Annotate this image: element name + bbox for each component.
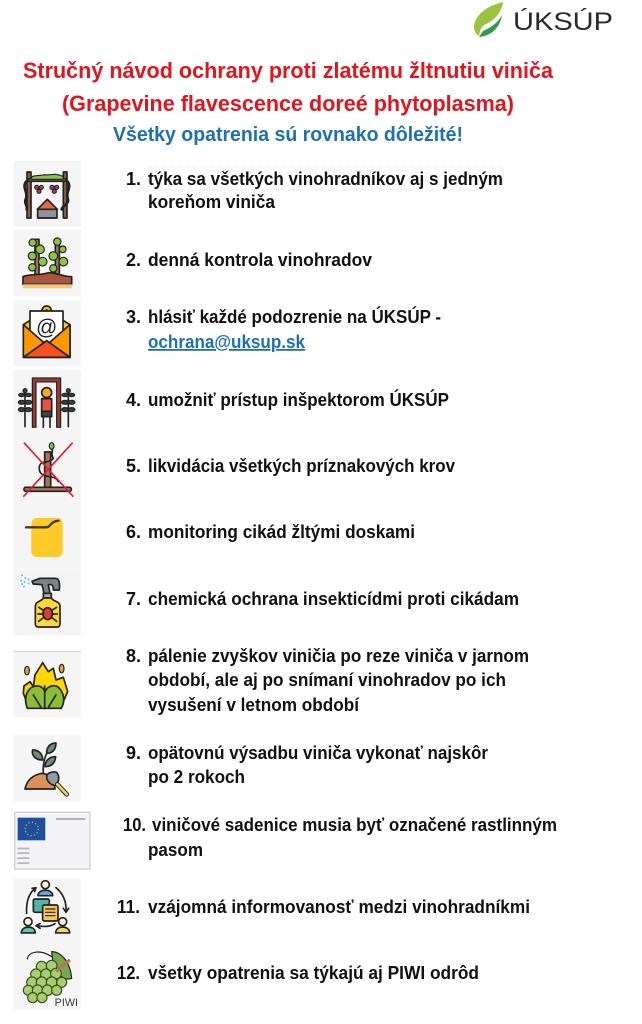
- item 1: týka sa všetkých vinohradníkov aj s jedným: [148, 169, 503, 189]
- icon: burning bush: [14, 651, 81, 717]
- icon: people exchanging information: [14, 878, 81, 944]
- item 4: [14, 370, 449, 436]
- item 6: [14, 502, 415, 569]
- item 3: [14, 300, 441, 366]
- item 7: chemická ochrana insekticídmi proti cikádam: [148, 589, 519, 609]
- item 7: 7.: [126, 589, 141, 609]
- item 9: [14, 735, 488, 802]
- item 6: monitoring cikád žltými doskami: [148, 522, 415, 542]
- item 5: likvidácia všetkých príznakových krov: [148, 456, 455, 476]
- logo: ÚKSÚP: [473, 0, 642, 40]
- icon: seedling with trowel: [14, 735, 81, 802]
- icon: envelope with at sign: @: [36, 314, 57, 339]
- item 4: umožniť prístup inšpektorom ÚKSÚP: [148, 389, 449, 410]
- item 4: 4.: [126, 390, 141, 410]
- icon: vineyard pergola with house: [14, 161, 81, 227]
- item 5: [14, 437, 455, 502]
- icon: yellow sticky board: [14, 502, 81, 569]
- item 5: 5.: [126, 456, 141, 476]
- item 2: [14, 230, 372, 296]
- email link: ochrana@uksup.sk: [148, 332, 306, 352]
- item 9: 9.: [126, 743, 141, 763]
- item 9: opätovnú výsadbu viniča vykonať najskôr: [148, 743, 488, 763]
- subtitle: Všetky opatrenia sú rovnako dôležité!: [113, 124, 463, 146]
- item 10: 10.: [123, 815, 146, 835]
- logo: ÚKSÚP: ÚKSÚP: [513, 7, 613, 36]
- item 3: 3.: [126, 307, 141, 327]
- item 8: 8.: [126, 646, 141, 666]
- title: [23, 58, 554, 116]
- icon: EU plant passport: [15, 812, 90, 869]
- icon: vines in soil: [14, 230, 81, 296]
- item 1: [14, 161, 503, 227]
- icon: PIWI grapes: PIWI: [55, 997, 78, 1009]
- item 10: pasom: [148, 840, 203, 860]
- item 11: [14, 878, 530, 944]
- item 8: [14, 646, 529, 717]
- item 3: hlásiť každé podozrenie na ÚKSÚP -: [148, 306, 441, 327]
- icon: envelope with at sign: [14, 300, 81, 366]
- item 6: 6.: [126, 522, 141, 542]
- item 11: 11.: [117, 897, 140, 917]
- item 10: viničové sadenice musia byť označené rastlinným: [152, 815, 557, 835]
- icon: insecticide spray bottle: [14, 569, 81, 636]
- icon: PIWI grapes: [14, 944, 81, 1009]
- item 8: vysušení v letnom období: [148, 695, 360, 715]
- item text frame: [148, 167, 503, 190]
- icon: person in gate between plants: [14, 370, 81, 436]
- item 12: 12.: [117, 963, 140, 983]
- item 2: 2.: [126, 250, 141, 270]
- item 12: všetky opatrenia sa týkajú aj PIWI odrôd: [148, 963, 479, 983]
- icon: crossed-out vine: [14, 437, 81, 502]
- title: (Grapevine flavescence doreé phytoplasma): [62, 91, 514, 116]
- item 11: vzájomná informovanosť medzi vinohradníkmi: [148, 897, 530, 917]
- item 8: pálenie zvyškov viničia po reze viniča v jarnom: [148, 646, 529, 666]
- item 2: denná kontrola vinohradov: [148, 250, 372, 270]
- item 9: po 2 rokoch: [148, 767, 245, 787]
- title: Stručný návod ochrany proti zlatému žltnutiu viniča: [23, 58, 554, 83]
- item 10: [15, 812, 557, 869]
- item 1: 1.: [126, 169, 141, 189]
- item 1: koreňom viniča: [148, 192, 276, 212]
- item 8: období, ale aj po snímaní vinohradov po ich: [148, 670, 506, 690]
- item 12: [14, 944, 479, 1009]
- item 7: [14, 569, 519, 636]
